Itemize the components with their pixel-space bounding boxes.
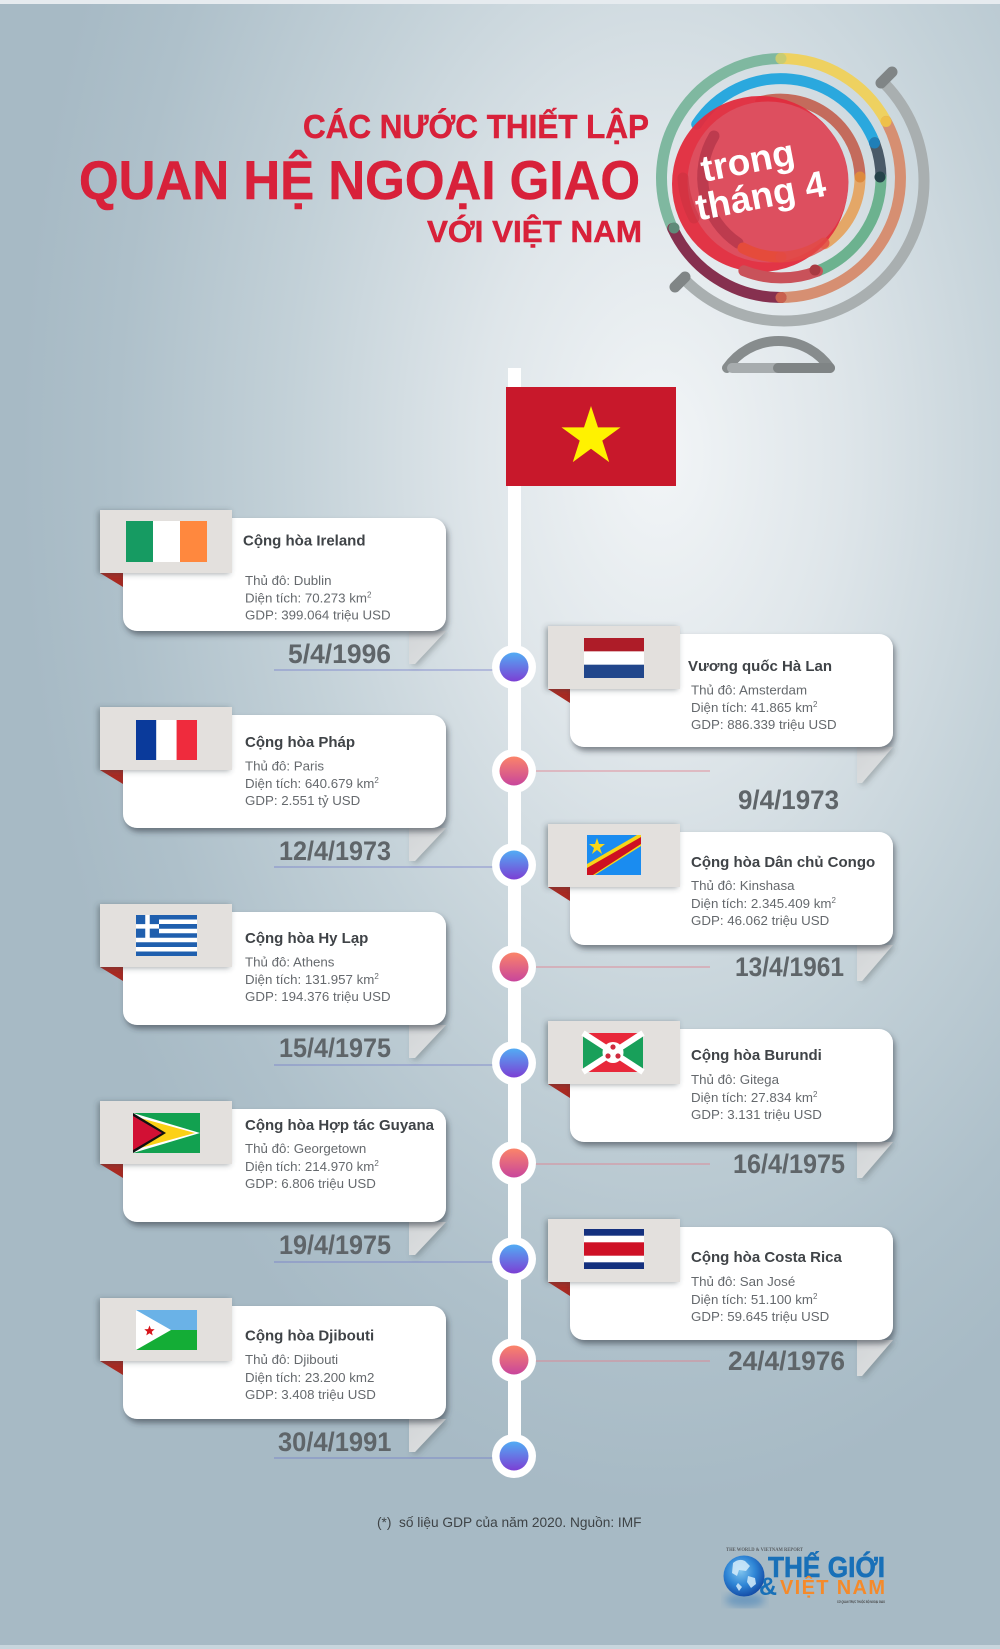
card: DR Congo: Thủ đô: Kinshasa — [691, 878, 795, 893]
card: Costa Rica: Diện tích: 51.100 km — [691, 1292, 813, 1307]
card: Ireland: GDP: 399.064 triệu USD — [245, 608, 391, 622]
card: Burundi: Thủ đô: Gitega — [691, 1072, 780, 1087]
card: Netherlands — [548, 626, 893, 815]
flag: Guyana — [133, 1113, 200, 1153]
card: Ireland: 5/4/1996 — [288, 639, 391, 669]
globe illustration — [662, 53, 924, 368]
card: Guyana: Diện tích: 214.970 km — [245, 1159, 374, 1174]
card: France — [100, 707, 446, 866]
card: Greece: 2 — [374, 972, 379, 981]
card: Djibouti — [100, 1298, 446, 1457]
flagpole — [508, 368, 521, 1458]
logo: VIỆT NAM — [780, 1575, 885, 1599]
card: Costa Rica — [548, 1219, 893, 1376]
card: Ireland: Thủ đô: Dublin — [245, 573, 331, 588]
title: CÁC NƯỚC THIẾT LẬP — [303, 108, 649, 145]
card: France: Thủ đô: Paris — [245, 758, 324, 774]
card: Djibouti: GDP: 3.408 triệu USD — [245, 1387, 376, 1402]
card: Costa Rica: 24/4/1976 — [728, 1346, 845, 1376]
card: Greece: GDP: 194.376 triệu USD — [245, 989, 391, 1004]
logo: & — [759, 1573, 777, 1601]
card: Ireland: 2 — [367, 590, 372, 600]
card: Costa Rica: Thủ đô: San José — [691, 1274, 795, 1289]
timeline nodes — [492, 645, 536, 1478]
vietnam flag — [506, 387, 676, 486]
flag: Greece — [136, 915, 197, 956]
card: Burundi: Diện tích: 27.834 km — [691, 1090, 813, 1105]
card: Djibouti: Diện tích: 23.200 km2 — [245, 1370, 374, 1385]
flag: DR Congo — [587, 835, 641, 875]
card: Guyana: Thủ đô: Georgetown — [245, 1141, 366, 1156]
globe text: tháng 4 — [692, 163, 830, 228]
card: Guyana: 19/4/1975 — [279, 1230, 391, 1260]
card: France: GDP: 2.551 tỷ USD — [245, 793, 360, 808]
flag: Netherlands — [584, 638, 644, 678]
card: Guyana — [100, 1101, 446, 1260]
card: Greece: Thủ đô: Athens — [245, 954, 335, 970]
logo: THE WORLD & VIETNAM REPORT — [726, 1547, 803, 1553]
card: Burundi: 16/4/1975 — [733, 1149, 845, 1179]
card: Netherlands: GDP: 886.339 triệu USD — [691, 717, 837, 732]
card: France: Cộng hòa Pháp — [245, 734, 355, 751]
title — [79, 108, 649, 249]
card: DR Congo: 2 — [831, 896, 836, 905]
card: Burundi: GDP: 3.131 triệu USD — [691, 1107, 822, 1122]
card: Burundi: Cộng hòa Burundi — [691, 1047, 822, 1064]
card: Greece — [100, 904, 446, 1063]
card: Ireland: Cộng hòa Ireland — [243, 532, 366, 550]
card: Djibouti: 30/4/1991 — [278, 1427, 392, 1457]
card: DR Congo: 13/4/1961 — [735, 952, 844, 982]
card: Netherlands: Vương quốc Hà Lan — [688, 658, 832, 675]
title: QUAN HỆ NGOẠI GIAO — [79, 149, 640, 211]
globe text: trong — [697, 132, 798, 190]
card: Burundi: 2 — [813, 1090, 818, 1099]
connector lines — [274, 670, 710, 1458]
card: Netherlands: Thủ đô: Amsterdam — [691, 682, 807, 698]
card: DR Congo: Diện tích: 2.345.409 km — [691, 896, 831, 911]
card: Costa Rica: Cộng hòa Costa Rica — [691, 1249, 843, 1266]
card: France: 12/4/1973 — [279, 836, 391, 866]
logo: CƠ QUAN TRỰC THUỘC BỘ NGOẠI GIAO — [837, 1599, 885, 1604]
footnote: (*) số liệu GDP của năm 2020. Nguồn: IMF — [377, 1515, 642, 1530]
card: DR Congo — [548, 824, 893, 982]
flag: Costa Rica — [584, 1229, 644, 1269]
card: Ireland: Diện tích: 70.273 km — [245, 590, 367, 606]
flag: France — [136, 720, 197, 760]
title: VỚI VIỆT NAM — [427, 213, 642, 249]
card: Costa Rica: 2 — [813, 1292, 818, 1301]
card: France: 2 — [374, 776, 379, 785]
card: Greece: Cộng hòa Hy Lạp — [245, 930, 368, 947]
card: Costa Rica: GDP: 59.645 triệu USD — [691, 1309, 829, 1324]
card: Djibouti: Cộng hòa Djibouti — [245, 1328, 374, 1344]
logo: THẾ GIỚI — [768, 1550, 885, 1584]
card: Greece: Diện tích: 131.957 km — [245, 972, 374, 987]
card: Netherlands: Diện tích: 41.865 km — [691, 700, 813, 715]
flag: Djibouti — [136, 1310, 197, 1350]
card: Netherlands: 2 — [813, 700, 818, 709]
flag: Burundi — [583, 1033, 643, 1072]
card: Ireland — [100, 510, 446, 669]
flag: Ireland — [126, 521, 207, 562]
card: DR Congo: GDP: 46.062 triệu USD — [691, 913, 829, 928]
card: DR Congo: Cộng hòa Dân chủ Congo — [691, 854, 875, 871]
card: Djibouti: Thủ đô: Djibouti — [245, 1352, 338, 1367]
card: Greece: 15/4/1975 — [279, 1033, 391, 1063]
card: Burundi — [548, 1021, 893, 1179]
card: France: Diện tích: 640.679 km — [245, 776, 374, 791]
card: Guyana: GDP: 6.806 triệu USD — [245, 1176, 376, 1191]
card: Netherlands: 9/4/1973 — [738, 785, 839, 815]
logo — [724, 1547, 885, 1607]
card: Guyana: 2 — [374, 1159, 379, 1168]
globe text — [692, 132, 830, 228]
card: Guyana: Cộng hòa Hợp tác Guyana — [245, 1117, 435, 1134]
